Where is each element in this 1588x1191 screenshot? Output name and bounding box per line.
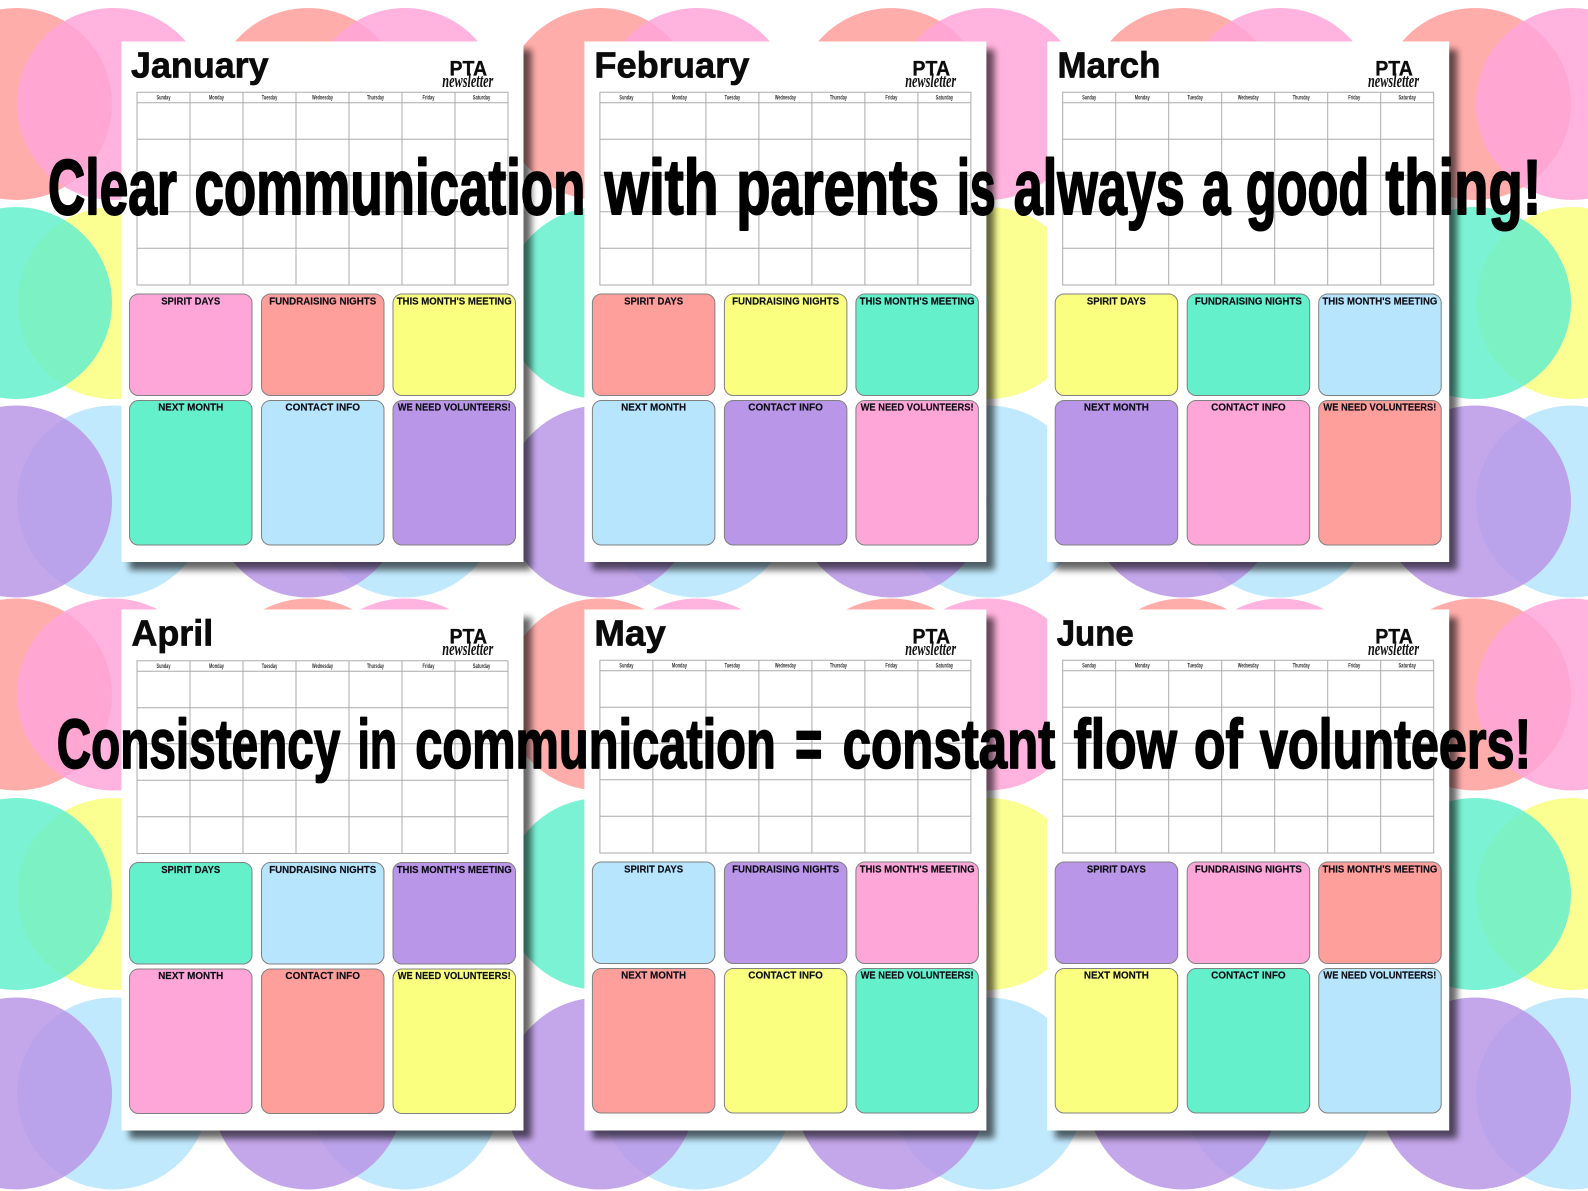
headline: clear communication: a [1202,143,1231,231]
calendar grid: Wednesday [1238,94,1259,102]
headline: consistency in communication: in [358,705,397,783]
panel: March newsletter page [1047,42,1457,570]
headline: consistency in communication: = [795,705,822,783]
box: we need volunteers [856,968,978,1113]
box: spirit days [1055,294,1178,396]
calendar grid: Monday [1135,662,1150,670]
box: fundraising nights [262,294,384,396]
calendar grid: Wednesday [775,94,796,102]
calendar grid: Saturday [1398,94,1416,102]
headline: clear communication: communication [194,143,586,231]
calendar grid: Friday [422,663,435,670]
headline: consistency in communication: Consistency [57,705,340,783]
heading: April: April [132,612,213,654]
box: we need volunteers [393,400,516,545]
box: spirit days [592,294,715,396]
logo: PTA newsletter: PTA [1375,58,1413,81]
calendar grid [600,660,971,853]
box: contact info: CONTACT INFO [285,402,360,414]
calendar grid: Thursday [830,94,847,102]
headline: consistency in communication [57,705,1531,783]
box: fundraising nights [1187,294,1310,396]
calendar grid: Tuesday [725,662,740,670]
calendar grid: Tuesday [262,94,277,102]
box: fundraising nights: FUNDRAISING NIGHTS [269,295,376,307]
box: spirit days: SPIRIT DAYS [1087,295,1146,307]
calendar grid: Sunday [619,662,634,670]
box: we need volunteers [856,400,978,545]
heading: January: January [131,44,269,86]
box: spirit days [1055,862,1178,964]
calendar grid [137,92,508,285]
calendar grid: Tuesday [262,663,277,670]
box: fundraising nights: FUNDRAISING NIGHTS [732,295,839,307]
calendar grid: Saturday [936,662,953,670]
box: spirit days: SPIRIT DAYS [624,863,683,875]
box: contact info: CONTACT INFO [748,970,823,982]
headline: consistency in communication: of [1194,705,1243,783]
box: this month's meeting: THIS MONTH'S MEETING [1322,295,1437,307]
box: fundraising nights: FUNDRAISING NIGHTS [1195,863,1302,875]
heading: March: March [1057,44,1160,86]
calendar grid: Thursday [367,663,384,670]
box: spirit days: SPIRIT DAYS [624,295,683,307]
box: contact info [262,400,384,545]
calendar grid: Saturday [473,94,490,102]
headline: consistency in communication: communication [415,705,776,783]
logo: PTA newsletter [1368,58,1419,92]
box: contact info [724,400,847,545]
box: fundraising nights [1187,862,1310,964]
box: this month's meeting [1319,862,1441,964]
calendar grid: Sunday [156,94,171,102]
box: fundraising nights [724,862,847,964]
box: this month's meeting: THIS MONTH'S MEETING [1322,863,1437,875]
box: we need volunteers [393,969,516,1114]
box: next month: NEXT MONTH [621,402,686,414]
logo: PTA newsletter [905,58,957,92]
box: spirit days [130,862,252,964]
box: fundraising nights [262,862,384,964]
box: this month's meeting [1319,294,1441,396]
box: we need volunteers: WE NEED VOLUNTEERS! [1323,402,1436,414]
box: spirit days [592,862,715,964]
calendar grid: Saturday [936,94,953,102]
headline: clear communication: parents [736,143,939,231]
panel: June newsletter page [1047,610,1457,1138]
panel: February newsletter page [584,42,994,570]
headline: clear communication: with [604,143,719,231]
logo: PTA newsletter: newsletter [442,71,494,92]
calendar grid: Sunday [1082,662,1096,670]
calendar grid: Thursday [367,94,384,102]
box: next month [592,400,715,545]
box: contact info [262,969,384,1114]
calendar grid: Monday [209,663,224,670]
box: we need volunteers: WE NEED VOLUNTEERS! [861,402,974,414]
calendar grid: Monday [1135,94,1150,102]
box: we need volunteers: WE NEED VOLUNTEERS! [398,402,511,414]
box: fundraising nights [724,294,847,396]
box: this month's meeting: THIS MONTH'S MEETING [397,864,512,876]
panel: January newsletter page [122,42,532,570]
box: fundraising nights: FUNDRAISING NIGHTS [269,864,376,876]
headline: clear communication [48,143,1542,231]
box: this month's meeting [393,294,516,396]
calendar grid: Thursday [1293,94,1310,102]
calendar grid: Wednesday [312,94,333,102]
box: contact info [1187,968,1310,1113]
box: next month: NEXT MONTH [621,970,686,982]
calendar grid: Tuesday [1187,662,1203,670]
headline: clear communication: is [957,143,996,231]
calendar grid: Saturday [1398,662,1416,670]
box: contact info [724,968,847,1113]
calendar grid: Sunday [1082,94,1096,102]
box: we need volunteers: WE NEED VOLUNTEERS! [861,970,974,982]
logo: PTA newsletter: newsletter [1368,639,1419,660]
box: next month [592,968,715,1113]
calendar grid: Wednesday [775,662,796,670]
box: next month [1055,968,1178,1113]
calendar grid: Friday [422,94,435,102]
logo: PTA newsletter: PTA [450,58,487,81]
logo: PTA newsletter [905,626,957,660]
box: spirit days: SPIRIT DAYS [161,295,220,307]
calendar grid: Friday [885,662,898,670]
box: contact info: CONTACT INFO [285,970,360,982]
box: next month [1055,400,1178,545]
box: spirit days: SPIRIT DAYS [161,864,220,876]
calendar grid [1063,660,1434,853]
calendar grid: Friday [1348,94,1360,102]
box: we need volunteers: WE NEED VOLUNTEERS! [398,970,511,982]
calendar grid: Wednesday [1238,662,1259,670]
box: this month's meeting [393,862,516,964]
background: overlapping pastel circles [0,8,1571,790]
calendar grid: Tuesday [725,94,740,102]
calendar grid [1063,92,1434,285]
box: next month: NEXT MONTH [1084,970,1149,982]
panel: April newsletter page [122,610,532,1138]
logo: PTA newsletter: PTA [912,626,950,649]
heading: May: May [594,612,666,654]
headline: clear communication: Clear [48,143,177,231]
calendar grid [137,661,508,854]
logo: PTA newsletter [1368,626,1419,660]
box: this month's meeting [856,862,978,964]
box: contact info: CONTACT INFO [1211,402,1286,414]
calendar grid: Wednesday [312,663,333,670]
logo: PTA newsletter: newsletter [442,639,494,660]
logo: PTA newsletter [442,58,494,92]
box: contact info: CONTACT INFO [748,402,823,414]
box: contact info [1187,400,1310,545]
box: next month: NEXT MONTH [158,970,223,982]
box: this month's meeting: THIS MONTH'S MEETING [860,295,975,307]
logo: PTA newsletter: newsletter [905,71,957,92]
heading: June: June [1057,612,1134,654]
box: next month: NEXT MONTH [158,402,223,414]
box: spirit days: SPIRIT DAYS [1087,863,1146,875]
logo: PTA newsletter: PTA [450,626,487,649]
headline: clear communication: always [1014,143,1185,231]
calendar grid: Sunday [156,663,171,670]
box: fundraising nights: FUNDRAISING NIGHTS [1195,295,1302,307]
calendar grid: Thursday [830,662,847,670]
calendar grid: Monday [209,94,224,102]
headline: consistency in communication: constant [843,705,1055,783]
box: we need volunteers [1319,400,1441,545]
box: next month: NEXT MONTH [1084,402,1149,414]
calendar grid: Friday [885,94,898,102]
box: this month's meeting: THIS MONTH'S MEETING [397,295,512,307]
box: we need volunteers: WE NEED VOLUNTEERS! [1323,970,1436,982]
logo: PTA newsletter: newsletter [905,639,957,660]
logo: PTA newsletter: PTA [1375,626,1413,649]
box: next month [130,969,252,1114]
box: fundraising nights: FUNDRAISING NIGHTS [732,863,839,875]
headline: consistency in communication: flow [1074,705,1177,783]
headline: clear communication: good [1246,143,1369,231]
logo: PTA newsletter: newsletter [1368,71,1419,92]
box: we need volunteers [1319,968,1441,1113]
calendar grid: Thursday [1293,662,1310,670]
calendar grid: Sunday [619,94,634,102]
calendar grid: Monday [672,662,687,670]
calendar grid: Monday [672,94,687,102]
calendar grid: Saturday [473,663,490,670]
box: spirit days [130,294,252,396]
calendar grid: Tuesday [1187,94,1203,102]
box: next month [130,400,252,545]
box: this month's meeting [856,294,978,396]
calendar grid: Friday [1348,662,1360,670]
calendar grid [600,92,971,285]
logo: PTA newsletter: PTA [912,58,950,81]
logo: PTA newsletter [442,626,494,660]
panel: May newsletter page [584,610,994,1138]
box: contact info: CONTACT INFO [1211,970,1286,982]
box: this month's meeting: THIS MONTH'S MEETING [860,863,975,875]
heading: February: February [594,44,749,86]
